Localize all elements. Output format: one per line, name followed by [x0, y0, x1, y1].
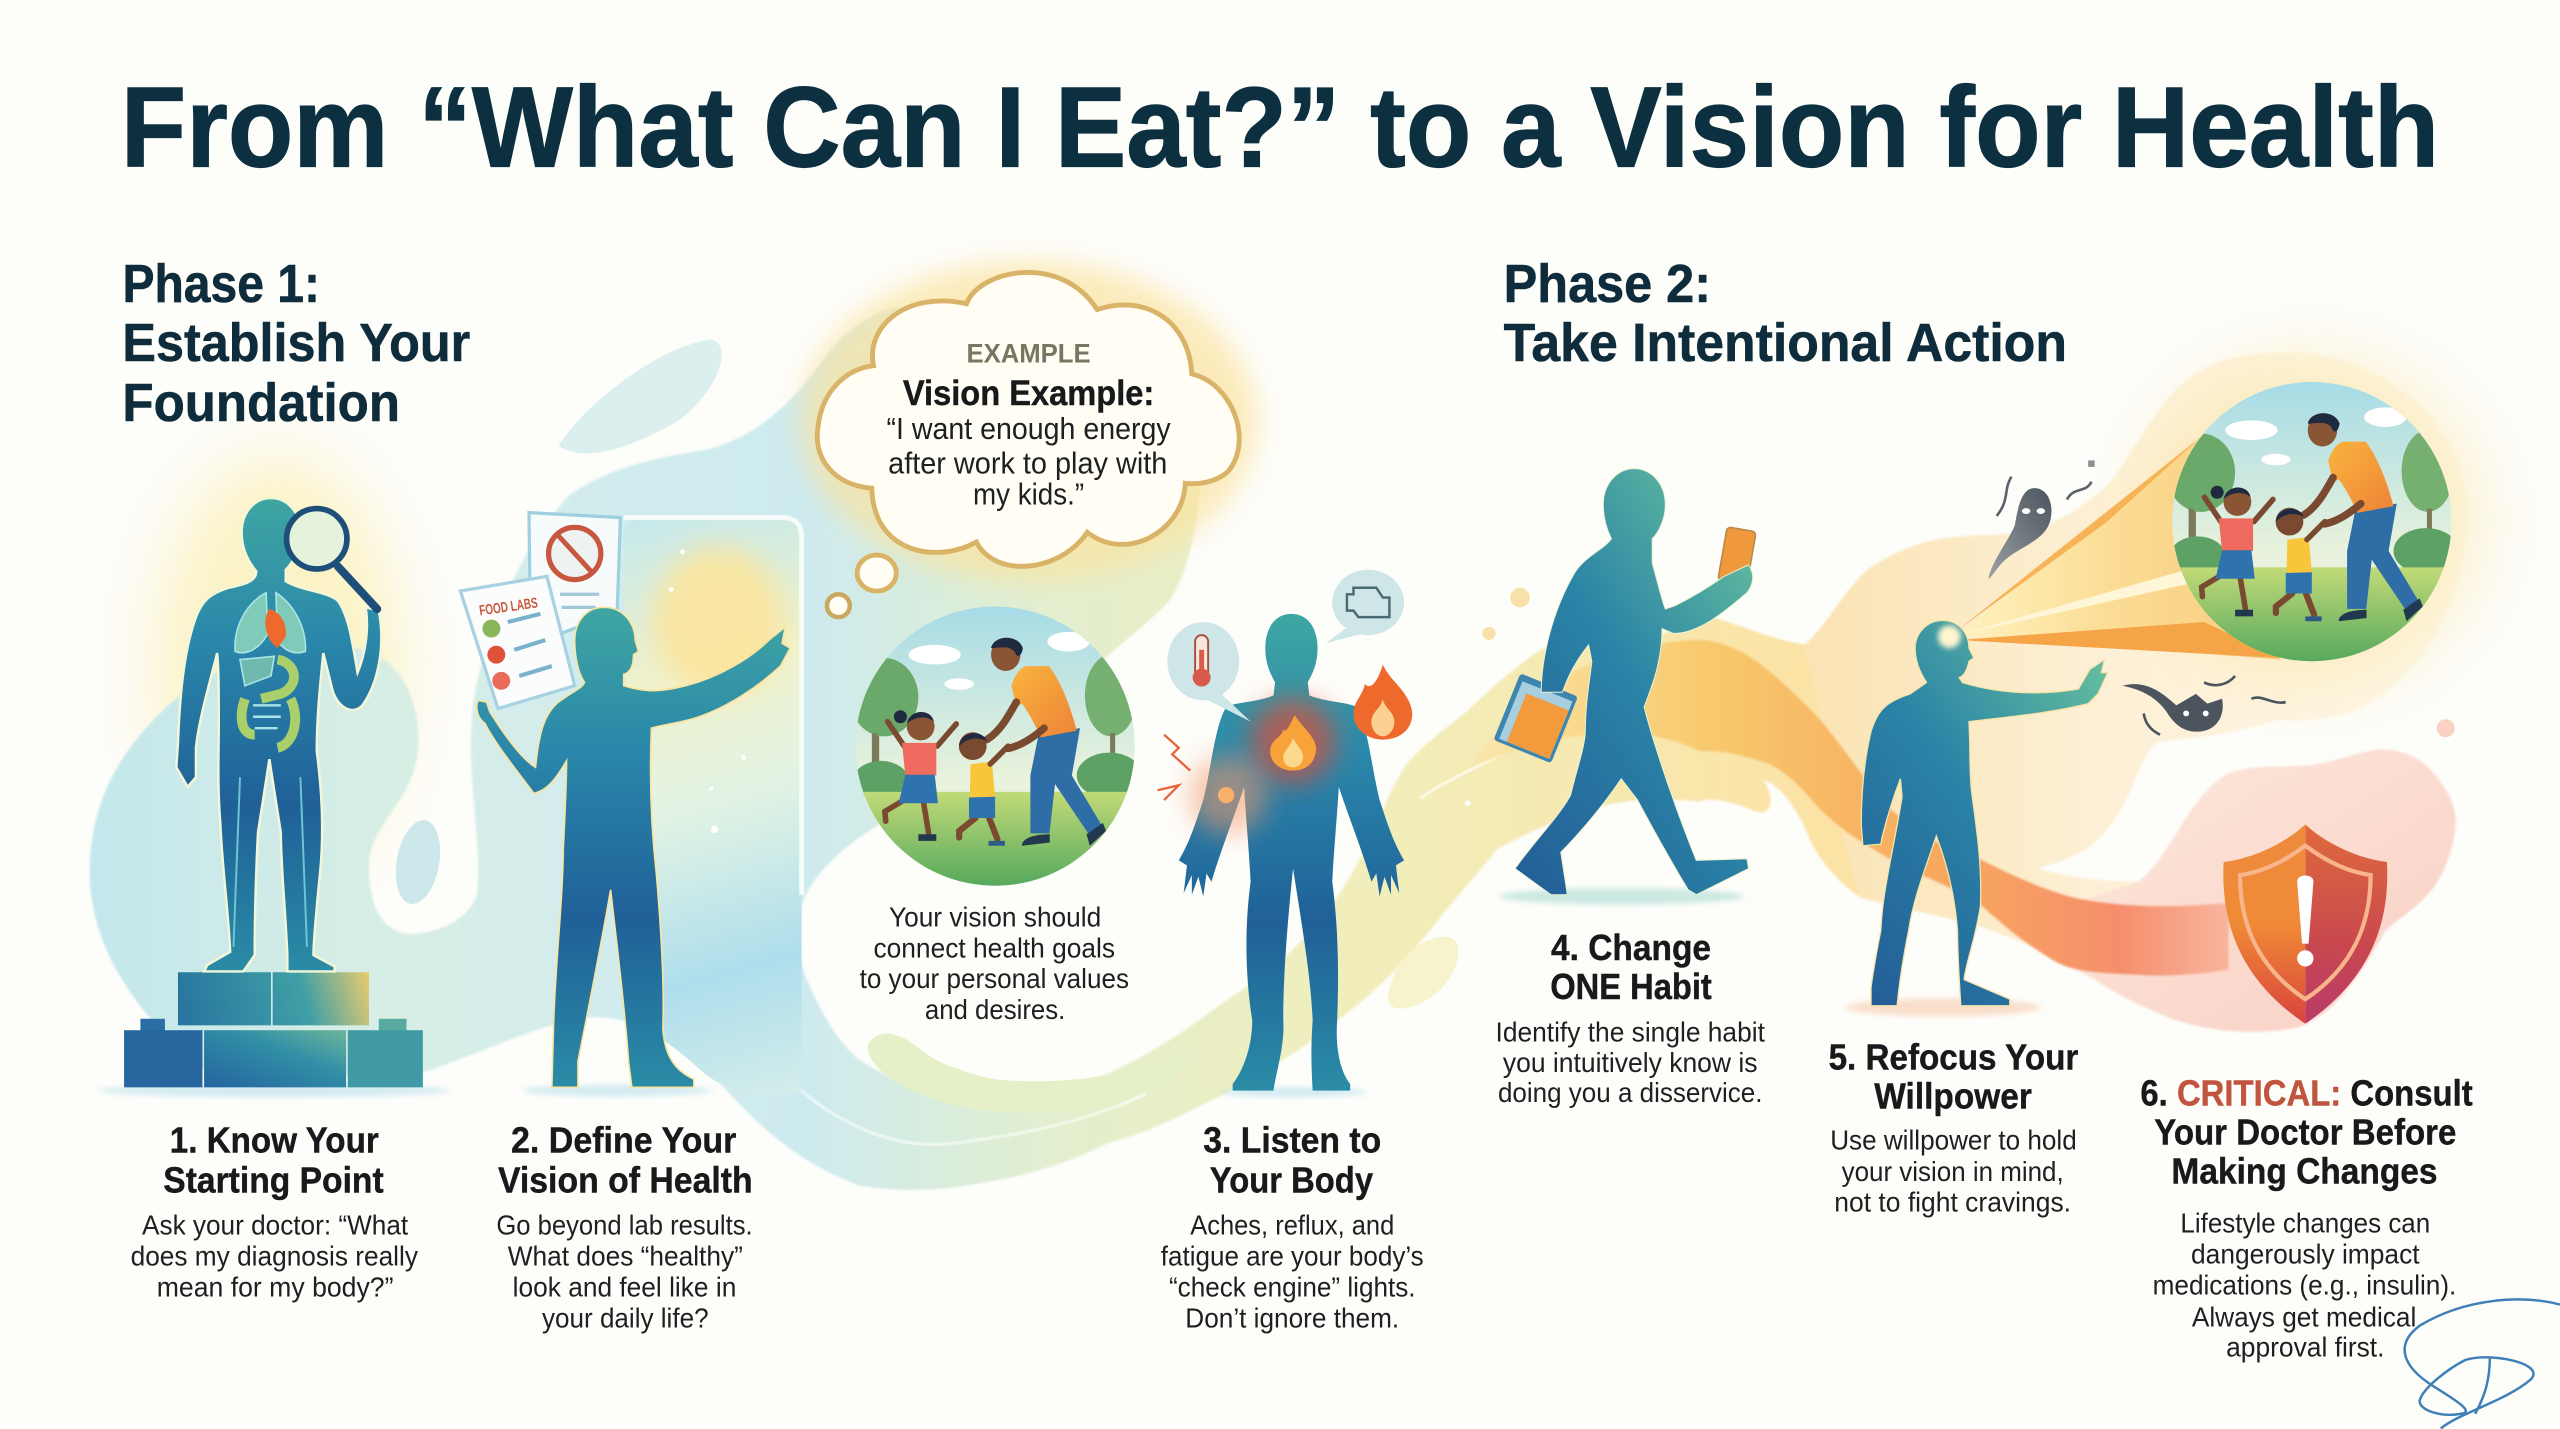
foundation blocks [124, 972, 423, 1087]
step 3 text: “check engine” lights. [1169, 1271, 1416, 1302]
step 2 text [496, 1120, 753, 1333]
step 4 figure: walking person [1493, 469, 1756, 905]
step 5 text: Use willpower to hold [1830, 1124, 2077, 1155]
step 1 text: does my diagnosis really [131, 1240, 418, 1271]
step 3 text: fatigue are your body’s [1161, 1240, 1424, 1271]
step 1 text: Starting Point [163, 1160, 384, 1201]
step 6 text: 6. CRITICAL: Consult [2140, 1072, 2473, 1113]
step 6 text: dangerously impact [2191, 1239, 2420, 1270]
decorative dots [1482, 588, 2455, 737]
craving ghost [1989, 460, 2095, 579]
thought bubbles [857, 555, 896, 591]
habit book [1493, 673, 1578, 763]
craving mask [2122, 676, 2286, 735]
step 1 text [131, 1120, 418, 1302]
phase 1 heading: Phase 1: [122, 254, 320, 314]
step 3 figure: body signals [1158, 570, 1412, 1097]
lab papers [460, 513, 620, 709]
organs [233, 593, 307, 947]
phase 1 heading: Foundation [122, 373, 400, 433]
arm pain [1158, 735, 1267, 834]
step 2 text: your daily life? [542, 1302, 709, 1333]
cloud text: my kids.” [973, 478, 1084, 511]
title: From “What Can I Eat?” to a Vision for Health [121, 65, 2439, 192]
step 5 text [1829, 1036, 2078, 1217]
vision description text: Your vision should [889, 902, 1101, 933]
vision scene: parent playing with kids [850, 606, 1142, 890]
phase 2 heading: Take Intentional Action [1504, 313, 2067, 373]
cloud text [887, 338, 1171, 511]
signature [2405, 1299, 2560, 1429]
background flow: peach blob behind shield [2041, 749, 2456, 1032]
step 2 text: Go beyond lab results. [496, 1209, 753, 1240]
step 2 text: What does “healthy” [508, 1240, 743, 1271]
step 1 text: mean for my body?” [157, 1271, 393, 1302]
background flow: teal to yellow ribbon [90, 307, 1861, 1190]
step 2 figure: person pointing at mirror [460, 513, 802, 1096]
vision description text: connect health goals [873, 933, 1115, 964]
vision scene beam target [2167, 381, 2459, 665]
step 3 text [1161, 1120, 1424, 1333]
cloud text: “I want enough energy [887, 413, 1171, 446]
flame icon [1353, 664, 1412, 740]
step 5 text: your vision in mind, [1842, 1156, 2064, 1187]
step 4 text: ONE Habit [1550, 966, 1712, 1007]
callout: vision example thought cloud [800, 261, 1257, 617]
magnifying glass [287, 509, 377, 609]
vision description text: to your personal values [860, 963, 1129, 994]
phone [1718, 527, 1756, 585]
thermometer bubble [1167, 622, 1251, 722]
check engine bubble [1326, 570, 1404, 643]
step 6 text: Your Doctor Before [2154, 1112, 2456, 1153]
step 1 text: Ask your doctor: “What [142, 1209, 409, 1240]
step 6 text: approval first. [2226, 1332, 2384, 1363]
step 3 text: Don’t ignore them. [1185, 1302, 1399, 1333]
phase 1 heading [122, 254, 470, 433]
phase 2 heading: Phase 2: [1504, 254, 1711, 314]
lab papers: FOOD LABS [478, 595, 539, 619]
phase 1 heading: Establish Your [122, 313, 470, 373]
step 6 icon: warning shield [2223, 825, 2387, 1024]
vision description text: and desires. [925, 994, 1065, 1025]
step 1 figure: body on foundation blocks [98, 498, 451, 1097]
cloud text: after work to play with [888, 447, 1167, 480]
beam [1958, 434, 2281, 660]
step 5 text: not to fight cravings. [1834, 1186, 2071, 1217]
step 5 text: 5. Refocus Your [1829, 1036, 2078, 1077]
step 3 text: Your Body [1210, 1160, 1373, 1201]
step 3 text: 3. Listen to [1203, 1120, 1381, 1161]
step 2 text: 2. Define Your [511, 1120, 736, 1161]
background flow: saturated yellow to coral band [1469, 640, 2229, 976]
cloud text: EXAMPLE [967, 338, 1091, 368]
step 6 text: Lifestyle changes can [2180, 1208, 2430, 1239]
step 5 text: Willpower [1874, 1076, 2032, 1117]
step 1 text: 1. Know Your [170, 1120, 379, 1161]
step 2 text: Vision of Health [498, 1160, 753, 1201]
chest fire [1251, 699, 1336, 784]
step 4 text: you intuitively know is [1503, 1047, 1758, 1078]
step 6 text: Making Changes [2171, 1151, 2438, 1192]
step 3 text: Aches, reflux, and [1190, 1209, 1394, 1240]
step 6 text: medications (e.g., insulin). [2153, 1270, 2456, 1301]
background flow: peach lobe behind vision beam [1771, 352, 2466, 980]
cloud text: Vision Example: [903, 374, 1154, 413]
vision panel [624, 518, 802, 1095]
vision description text [860, 902, 1129, 1025]
step 4 text [1496, 927, 1765, 1108]
step 4 text: 4. Change [1551, 927, 1711, 968]
step 2 text: look and feel like in [513, 1271, 736, 1302]
step 5 figure: vision beam [1845, 358, 2483, 1016]
step 6 text [2140, 1072, 2473, 1363]
step 4 text: Identify the single habit [1496, 1017, 1765, 1048]
step 4 text: doing you a disservice. [1498, 1077, 1762, 1108]
phase 2 heading [1504, 254, 2067, 373]
step 6 text: Always get medical [2192, 1302, 2416, 1333]
